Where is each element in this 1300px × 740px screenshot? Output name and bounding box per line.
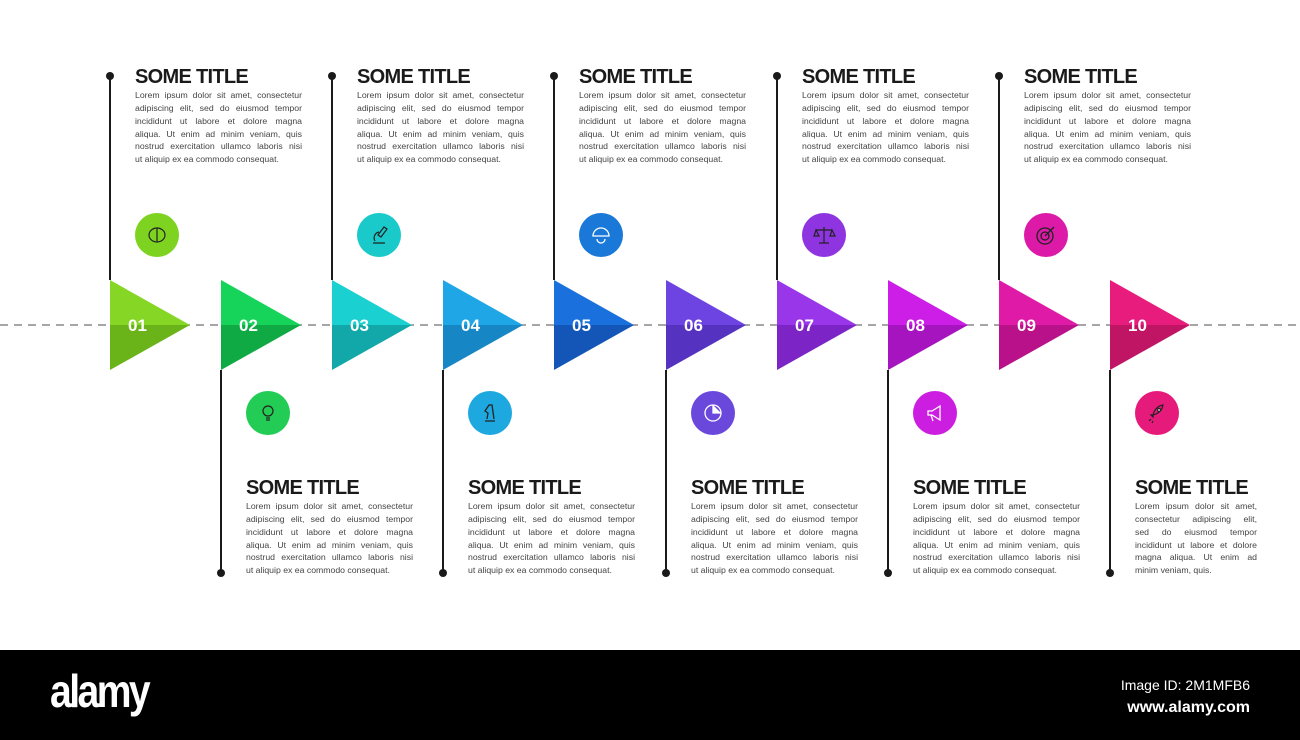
icon 04 chess knight <box>468 391 512 435</box>
text block 08: adipiscing elit, sed do eiusmod tempor <box>913 514 1080 524</box>
text block 06: nostrud exercitation ullamco laboris nisi <box>691 552 858 562</box>
text block 09: nostrud exercitation ullamco laboris nisi <box>1024 141 1191 151</box>
text block 01: SOME TITLE <box>135 66 248 88</box>
footer image id <box>1121 677 1250 716</box>
text block 10: sed do eiusmod tempor <box>1135 527 1257 537</box>
text block 07: nostrud exercitation ullamco laboris nisi <box>802 141 969 151</box>
flag 02: 02 <box>239 316 258 335</box>
flag 05: 05 <box>572 316 591 335</box>
text block 10: consectetur adipiscing elit, <box>1135 514 1257 524</box>
text block 06: adipiscing elit, sed do eiusmod tempor <box>691 514 858 524</box>
flag 10 <box>1110 280 1190 370</box>
flag 06 <box>666 280 746 370</box>
text block 01: aliqua. Ut enim ad minim veniam, quis <box>135 129 302 139</box>
flag 04: 04 <box>461 316 480 335</box>
text block 04: ut aliquip ex ea commodo consequat. <box>468 565 612 575</box>
flag 06: 06 <box>684 316 703 335</box>
icon 05 gear helmet <box>579 213 623 257</box>
text block 06: ut aliquip ex ea commodo consequat. <box>691 565 835 575</box>
text block 06 <box>691 477 858 575</box>
text block 05: incididunt ut labore et dolore magna <box>579 116 746 126</box>
footer logo: alamy <box>50 665 148 717</box>
text block 04: incididunt ut labore et dolore magna <box>468 527 635 537</box>
text block 06: SOME TITLE <box>691 477 804 499</box>
poles <box>109 76 111 280</box>
text block 02 <box>246 477 413 575</box>
text block 08: SOME TITLE <box>913 477 1026 499</box>
text block 05: nostrud exercitation ullamco laboris nisi <box>579 141 746 151</box>
text block 09: ut aliquip ex ea commodo consequat. <box>1024 154 1168 164</box>
text block 05: Lorem ipsum dolor sit amet, consectetur <box>579 90 746 100</box>
text block 08: nostrud exercitation ullamco laboris nisi <box>913 552 1080 562</box>
text block 05: SOME TITLE <box>579 66 692 88</box>
text block 10: incididunt ut labore et dolore <box>1135 540 1257 550</box>
text block 04: aliqua. Ut enim ad minim veniam, quis <box>468 540 635 550</box>
flag 03: 03 <box>350 316 369 335</box>
text block 09: incididunt ut labore et dolore magna <box>1024 116 1191 126</box>
footer image id: Image ID: 2M1MFB6 <box>1121 677 1250 693</box>
text block 10: SOME TITLE <box>1135 477 1248 499</box>
flag 01 <box>110 280 190 370</box>
text block 05 <box>579 66 746 164</box>
text block 03: ut aliquip ex ea commodo consequat. <box>357 154 501 164</box>
text block 05: ut aliquip ex ea commodo consequat. <box>579 154 723 164</box>
text block 02: ut aliquip ex ea commodo consequat. <box>246 565 390 575</box>
icon 06 pie chart <box>691 391 735 435</box>
text block 04: SOME TITLE <box>468 477 581 499</box>
text block 03: Lorem ipsum dolor sit amet, consectetur <box>357 90 524 100</box>
text block 03: nostrud exercitation ullamco laboris nisi <box>357 141 524 151</box>
text block 08: aliqua. Ut enim ad minim veniam, quis <box>913 540 1080 550</box>
text block 07: aliqua. Ut enim ad minim veniam, quis <box>802 129 969 139</box>
text block 06: aliqua. Ut enim ad minim veniam, quis <box>691 540 858 550</box>
flag 07 <box>777 280 857 370</box>
flag 05 <box>554 280 634 370</box>
flag 08 <box>888 280 968 370</box>
icon 03 microscope <box>357 213 401 257</box>
text block 07 <box>802 66 969 164</box>
text block 07: ut aliquip ex ea commodo consequat. <box>802 154 946 164</box>
icon 09 target <box>1024 213 1068 257</box>
text block 01: adipiscing elit, sed do eiusmod tempor <box>135 103 302 113</box>
text block 06: incididunt ut labore et dolore magna <box>691 527 858 537</box>
flag 03 <box>332 280 412 370</box>
text block 07: SOME TITLE <box>802 66 915 88</box>
footer image id: www.alamy.com <box>1127 699 1250 716</box>
text block 01: incididunt ut labore et dolore magna <box>135 116 302 126</box>
flag 02 <box>221 280 301 370</box>
icon 10 rocket <box>1135 391 1179 435</box>
text block 07: Lorem ipsum dolor sit amet, consectetur <box>802 90 969 100</box>
text block 04: nostrud exercitation ullamco laboris nisi <box>468 552 635 562</box>
text block 08: incididunt ut labore et dolore magna <box>913 527 1080 537</box>
text block 03: incididunt ut labore et dolore magna <box>357 116 524 126</box>
flag 07: 07 <box>795 316 814 335</box>
text block 03: aliqua. Ut enim ad minim veniam, quis <box>357 129 524 139</box>
text block 03 <box>357 66 524 164</box>
text block 02: Lorem ipsum dolor sit amet, consectetur <box>246 501 413 511</box>
text block 10: Lorem ipsum dolor sit amet, <box>1135 501 1257 511</box>
text block 05: aliqua. Ut enim ad minim veniam, quis <box>579 129 746 139</box>
flag 09: 09 <box>1017 316 1036 335</box>
text block 02: adipiscing elit, sed do eiusmod tempor <box>246 514 413 524</box>
text block 02: SOME TITLE <box>246 477 359 499</box>
text block 04: Lorem ipsum dolor sit amet, consectetur <box>468 501 635 511</box>
icon 02 bulb <box>246 391 290 435</box>
text block 07: incididunt ut labore et dolore magna <box>802 116 969 126</box>
text block 10: minim veniam, quis. <box>1135 565 1212 575</box>
text block 09: Lorem ipsum dolor sit amet, consectetur <box>1024 90 1191 100</box>
text block 08: ut aliquip ex ea commodo consequat. <box>913 565 1057 575</box>
text block 07: adipiscing elit, sed do eiusmod tempor <box>802 103 969 113</box>
flag 10: 10 <box>1128 316 1147 335</box>
text block 09: aliqua. Ut enim ad minim veniam, quis <box>1024 129 1191 139</box>
text block 05: adipiscing elit, sed do eiusmod tempor <box>579 103 746 113</box>
text block 10: magna aliqua. Ut enim ad <box>1135 552 1257 562</box>
icon 08 megaphone <box>913 391 957 435</box>
text block 09 <box>1024 66 1191 164</box>
icon 01 brain <box>135 213 179 257</box>
footer bar <box>0 650 1300 740</box>
text block 01: Lorem ipsum dolor sit amet, consectetur <box>135 90 302 100</box>
text block 02: aliqua. Ut enim ad minim veniam, quis <box>246 540 413 550</box>
text block 04: adipiscing elit, sed do eiusmod tempor <box>468 514 635 524</box>
flag 04 <box>443 280 523 370</box>
text block 04 <box>468 477 635 575</box>
text block 09: SOME TITLE <box>1024 66 1137 88</box>
text block 03: SOME TITLE <box>357 66 470 88</box>
text block 02: incididunt ut labore et dolore magna <box>246 527 413 537</box>
text block 01: nostrud exercitation ullamco laboris nisi <box>135 141 302 151</box>
text block 01: ut aliquip ex ea commodo consequat. <box>135 154 279 164</box>
flag 09 <box>999 280 1079 370</box>
text block 01 <box>135 66 302 164</box>
icon 07 scales <box>802 213 846 257</box>
text block 06: Lorem ipsum dolor sit amet, consectetur <box>691 501 858 511</box>
text block 03: adipiscing elit, sed do eiusmod tempor <box>357 103 524 113</box>
text block 08: Lorem ipsum dolor sit amet, consectetur <box>913 501 1080 511</box>
text block 02: nostrud exercitation ullamco laboris nisi <box>246 552 413 562</box>
text block 09: adipiscing elit, sed do eiusmod tempor <box>1024 103 1191 113</box>
text block 10 <box>1135 477 1257 575</box>
flag 01: 01 <box>128 316 147 335</box>
flag 08: 08 <box>906 316 925 335</box>
text block 08 <box>913 477 1080 575</box>
